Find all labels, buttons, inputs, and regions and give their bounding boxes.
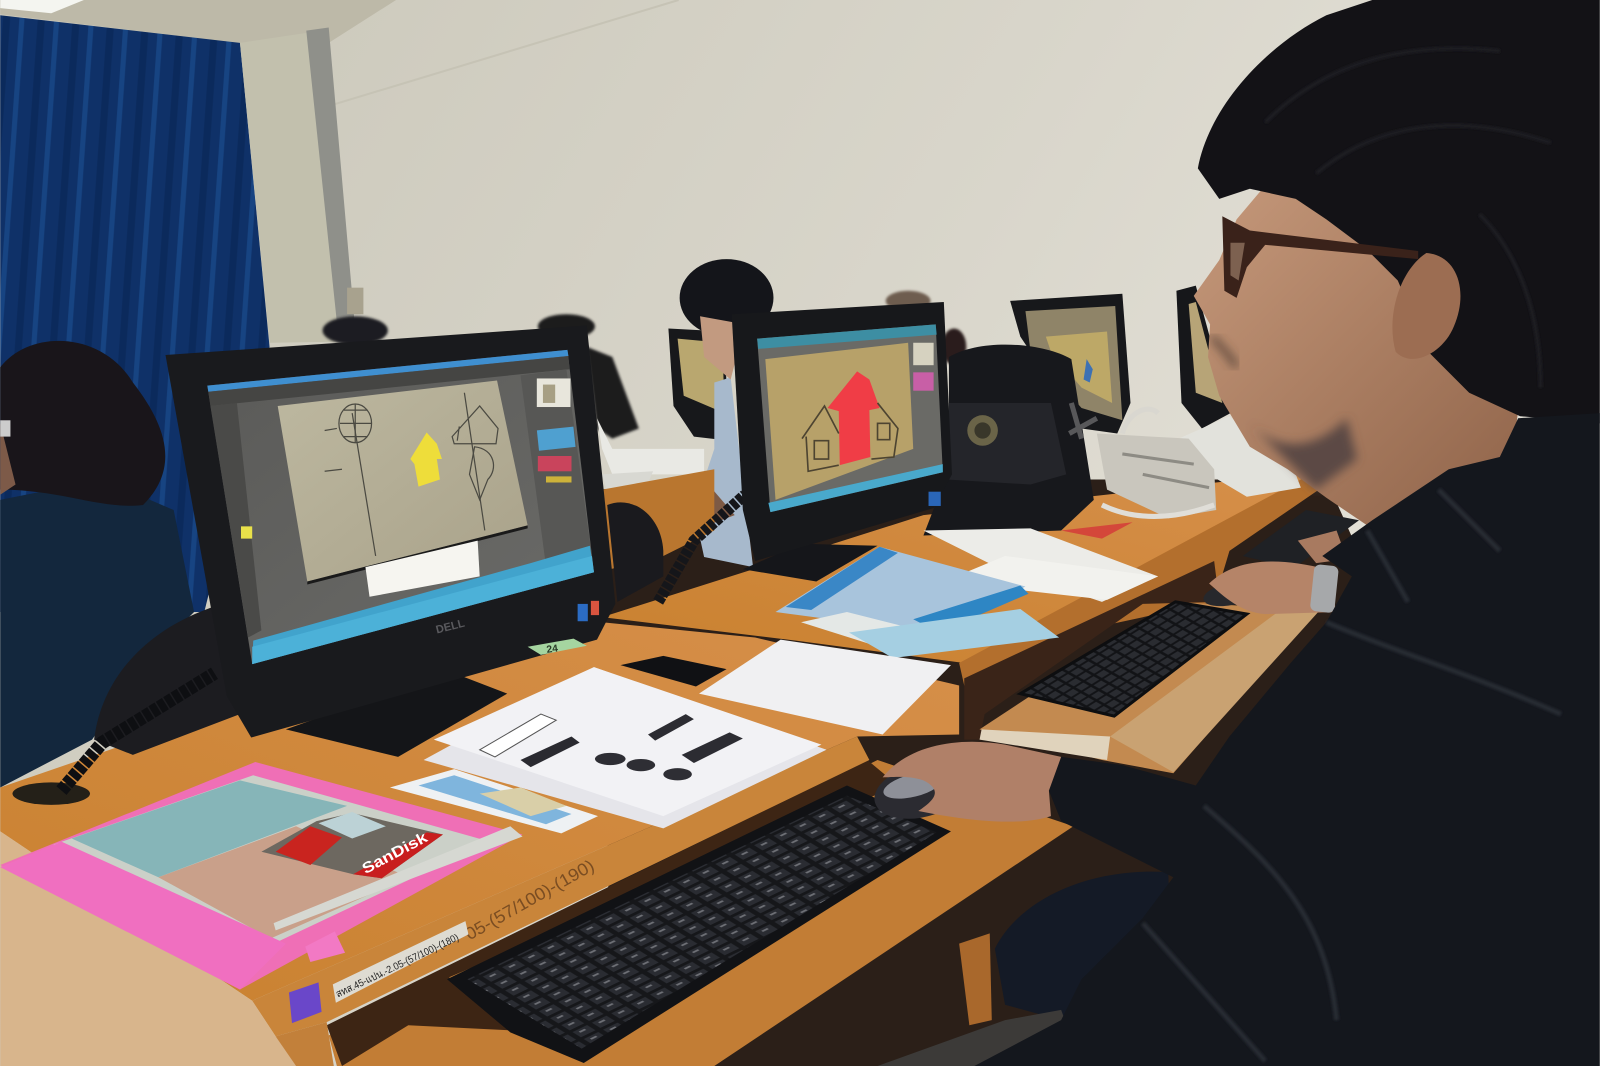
middle student [643,259,773,567]
black backpack [923,345,1097,536]
front cable spiral [12,673,214,805]
monitor 1 [166,325,615,757]
desk side panel [0,831,332,1066]
second row keyboard [1020,602,1247,716]
front chair [94,602,240,755]
cable spiral right [658,495,745,602]
man jeans [995,872,1173,1020]
middle chair [607,502,663,602]
red arrow house [828,371,880,465]
colour picker [537,427,576,451]
man's hair [1198,0,1600,423]
ceiling [0,0,679,105]
far right keyboard [1243,510,1359,568]
handout sheets [424,640,951,828]
second row keyboard tray [980,602,1318,773]
far row desk [602,469,714,571]
dell logo: DELL [435,618,466,636]
shirt folds [1143,490,1561,1061]
far hand with watch [1209,530,1347,614]
shadow under desk [327,760,898,1066]
front desk top [0,622,959,1001]
right end of front desk tray [959,933,992,1025]
glasses [1222,216,1418,298]
SanDisk card: SanDisk [359,829,431,878]
purple tag [289,982,322,1023]
monitor 3 [1010,294,1131,434]
man's ear [1392,253,1460,359]
pillar [240,28,363,343]
yellow house [410,433,442,487]
dark space under the desks [597,479,1367,1066]
far row monitor back [668,328,729,441]
front left student [0,341,194,788]
blue folder and documents [776,522,1158,658]
far right mouse [1201,577,1262,611]
curtain [0,15,270,612]
silver handbag [1097,409,1216,518]
monitor stand [286,671,507,757]
monitor 4 [1176,286,1230,428]
small printed card [390,769,598,833]
far desk papers [597,418,704,495]
number tag 24 [528,639,587,656]
front desk edge [252,737,869,1036]
monitor screen [207,350,594,664]
pink zip pouch [0,762,523,989]
front desk keyboard tray [329,760,1073,1066]
scanned drawing [278,380,528,581]
taskbar [252,546,594,664]
SanDisk card [261,812,443,878]
man's hand on mouse [883,742,1061,822]
front keyboard [447,785,951,1063]
hair strands [1265,48,1551,388]
front desk edge: 05-(57/100)-(190) [462,855,598,944]
man's neck and face [1194,173,1530,525]
monitor 2 [732,302,952,581]
far back students [323,291,966,439]
phone [620,656,727,687]
label sticker: สทส.45-แปน.-2.05-(57/100)-(180) [334,932,461,1000]
front mouse [868,753,974,828]
number tag 24: 24 [546,643,559,656]
far papers on right [1178,416,1301,497]
second row desk [602,471,1326,740]
man's shirt [974,413,1600,1066]
